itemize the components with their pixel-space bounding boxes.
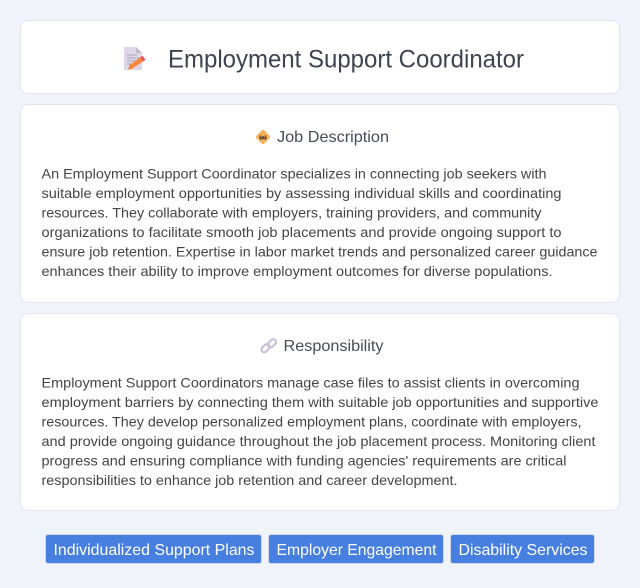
description text: ensure job retention. Expertise in labor market trends and personalized career guidance xyxy=(42,244,598,260)
tag: disability services: Disability Services xyxy=(458,542,588,559)
icon: chain link xyxy=(260,338,278,354)
responsibility text: progress and ensuring compliance with funding agencies' requirements are critical xyxy=(42,452,566,468)
description text: resources. They collaborate with employers, training providers, and community xyxy=(42,204,542,220)
panel: responsibility xyxy=(20,313,620,511)
description text xyxy=(42,166,598,279)
description text: organizations to facilitate smooth job placements and provide ongoing support to xyxy=(42,224,562,240)
heading: job description: Job Description xyxy=(277,129,389,146)
description text: An Employment Support Coordinator specializes in connecting job seekers with xyxy=(42,166,546,182)
responsibility text: resources. They develop personalized employment plans, coordinate with employers, xyxy=(42,414,582,430)
tag: individualized support plans xyxy=(45,534,262,564)
title: Employment Support Coordinator xyxy=(168,46,524,74)
responsibility text xyxy=(42,374,599,488)
responsibility text: employment barriers by connecting them with suitable job opportunities and supportive xyxy=(42,394,599,410)
header panel xyxy=(20,20,620,94)
panel: job description xyxy=(20,104,620,303)
tag: individualized support plans: Individualized Support Plans xyxy=(54,542,254,559)
heading: responsibility: Responsibility xyxy=(284,338,384,355)
responsibility text: responsibilities to enhance job retention and career development. xyxy=(42,472,457,488)
tag: employer engagement xyxy=(268,534,444,564)
tag: disability services xyxy=(450,534,595,564)
icon: document with pencil xyxy=(124,47,146,70)
description text: enhances their ability to improve employment outcomes for diverse populations. xyxy=(42,263,552,279)
description text: suitable employment opportunities by assessing individual skills and coordinating xyxy=(42,185,562,201)
responsibility text: and provide ongoing guidance throughout the job placement process. Monitoring client xyxy=(42,433,596,449)
tag: employer engagement: Employer Engagement xyxy=(276,542,437,559)
responsibility text: Employment Support Coordinators manage case files to assist clients in overcoming xyxy=(42,374,580,390)
icon: diamond sign xyxy=(256,130,270,144)
